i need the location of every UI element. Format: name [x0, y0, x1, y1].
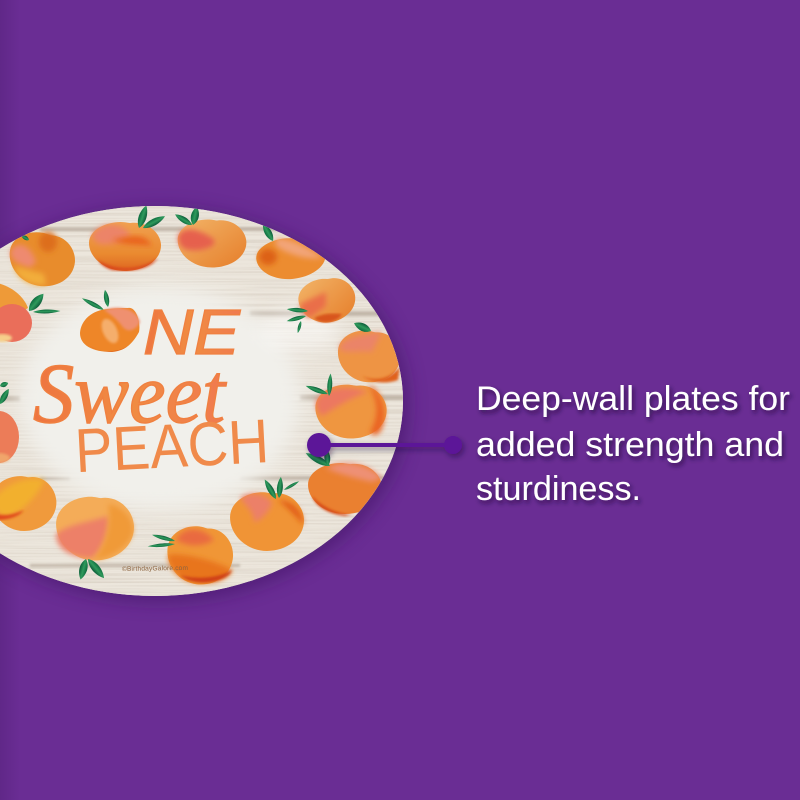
plate title: Sweet: Sweet	[33, 345, 227, 441]
callout connector	[307, 433, 462, 457]
peach 13	[0, 411, 19, 463]
wood texture	[0, 200, 410, 600]
connector line	[319, 443, 453, 447]
plate title: PEACH: PEACH	[73, 407, 271, 486]
callout text: sturdiness.	[476, 470, 641, 508]
plate	[0, 200, 410, 602]
anchor dot	[307, 433, 331, 457]
peach 9	[230, 492, 304, 551]
plate shadow	[0, 208, 409, 602]
callout text: added strength and	[476, 426, 784, 464]
white centre	[35, 300, 285, 496]
peach 2	[89, 222, 161, 271]
peach 3	[178, 219, 246, 268]
plate title: ONE: NE	[143, 296, 241, 368]
peach 1	[7, 228, 75, 290]
plate rim	[0, 206, 403, 596]
peach 12	[0, 476, 56, 531]
glare	[260, 308, 340, 352]
peach O	[80, 308, 140, 352]
peach 4	[255, 235, 325, 280]
end dot	[444, 436, 462, 454]
peach 10	[164, 523, 236, 588]
peach 5	[296, 278, 356, 324]
peach 7	[315, 384, 387, 438]
copyright: ©BirthdayGalore.com	[122, 564, 189, 573]
left edge shading	[0, 0, 20, 800]
callout text: Deep-wall plates for	[476, 380, 790, 418]
peach 11	[56, 497, 134, 560]
callout text	[476, 380, 790, 508]
peach 6	[335, 328, 402, 385]
plank seams	[0, 227, 410, 567]
peach 14	[0, 282, 32, 342]
peach 8	[308, 463, 382, 516]
peach ring	[0, 219, 402, 588]
leaves	[0, 204, 373, 581]
